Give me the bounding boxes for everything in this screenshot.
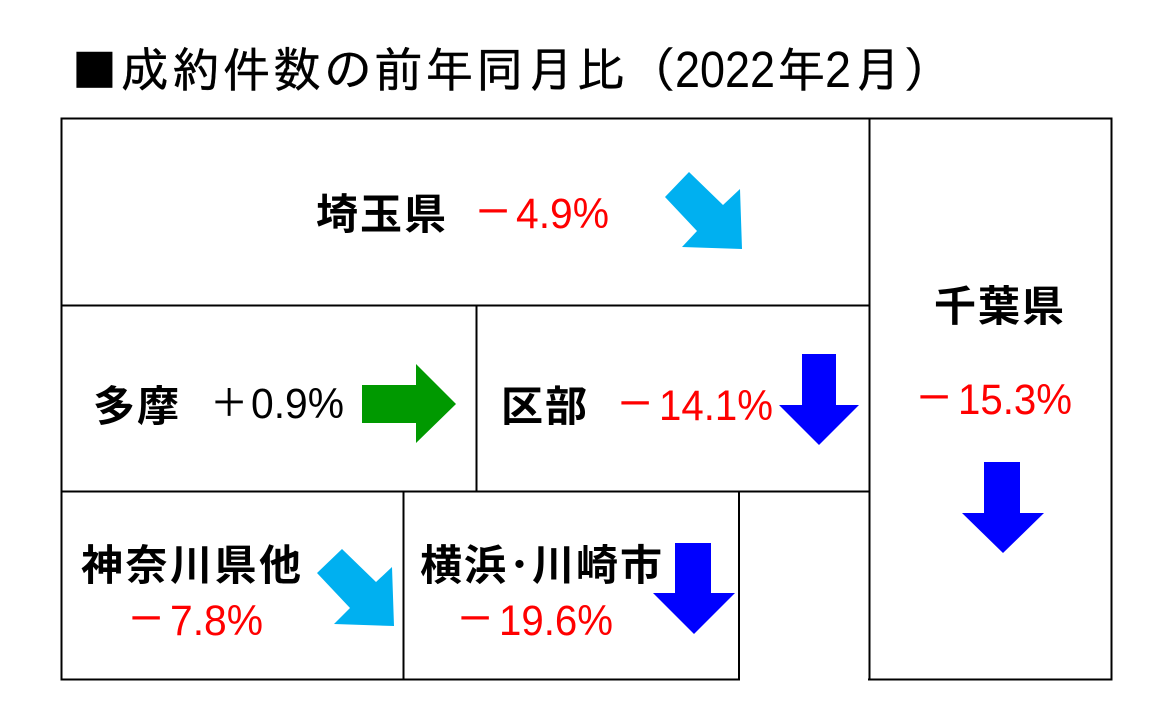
title — [70, 41, 951, 98]
panel: 埼玉県: － — [473, 191, 513, 231]
panel: 多摩: 0.9% — [251, 380, 344, 428]
panel: 神奈川県他: 神奈川県他 — [81, 532, 301, 593]
panel: 神奈川県他: 7.8% — [170, 597, 263, 645]
title: 2 — [825, 41, 851, 98]
panel: 区部: 区部 — [501, 373, 589, 434]
icon: green right arrow — [362, 364, 456, 443]
icon: light blue down-right arrow — [317, 549, 394, 626]
panel: 千葉県: 15.3% — [958, 376, 1072, 424]
panel: 多摩 — [93, 364, 456, 443]
title: 成約件数の前年同月比 — [121, 45, 625, 93]
panel: 千葉県: － — [914, 377, 954, 417]
panel: 横浜・川崎市: 横浜･川崎市 — [420, 532, 662, 593]
panel: 埼玉県: 4.9% — [516, 190, 609, 238]
panel: 神奈川県他 — [81, 532, 394, 645]
panel: 横浜・川崎市: 19.6% — [499, 597, 613, 645]
panel: 埼玉県 — [316, 172, 742, 249]
panel: 多摩: 多摩 — [93, 373, 181, 434]
panel: 神奈川県他: － — [126, 598, 166, 638]
title: ） — [903, 45, 951, 93]
panel: 区部 — [501, 354, 859, 445]
title: 年 — [777, 45, 825, 93]
icon: blue down arrow — [653, 543, 735, 634]
panel: 横浜・川崎市: － — [455, 598, 495, 638]
treemap frame — [61, 118, 1112, 683]
title: ■ — [70, 46, 118, 94]
icon: blue down arrow — [779, 354, 859, 445]
panel: 横浜・川崎市 — [420, 532, 735, 645]
title: （ — [628, 45, 676, 93]
title: 2022 — [675, 41, 775, 98]
title: 月 — [854, 45, 902, 93]
panel: 埼玉県: 埼玉県 — [316, 181, 448, 242]
panel: 千葉県: 千葉県 — [934, 273, 1066, 334]
icon: light blue down-right arrow — [665, 172, 742, 249]
panel: 多摩: ＋ — [209, 382, 249, 422]
panel: 区部: 14.1% — [659, 382, 773, 430]
icon: blue down arrow — [962, 462, 1044, 553]
panel: 区部: － — [615, 383, 655, 423]
panel: 千葉県 — [914, 273, 1072, 553]
